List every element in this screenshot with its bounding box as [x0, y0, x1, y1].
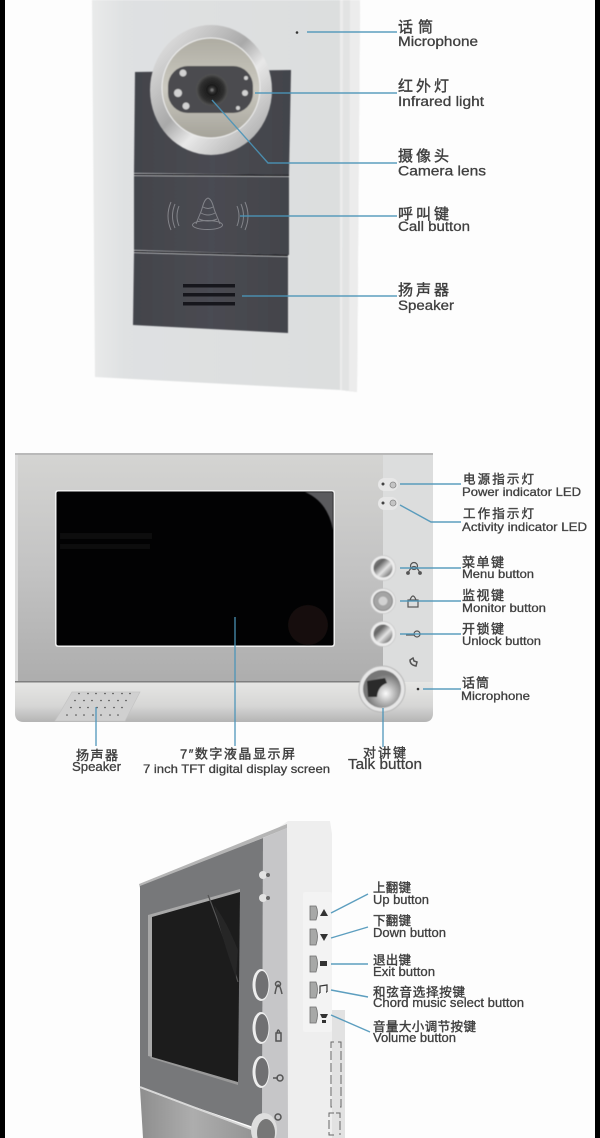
gray front bezel — [140, 838, 263, 1130]
callout: activity indicator LED: Activity indicator LED — [462, 520, 587, 534]
callout: speaker — [242, 281, 455, 313]
callout: chord music select button: Chord music select button — [373, 996, 524, 1010]
callout: microphone: Microphone — [461, 689, 530, 703]
callout: volume button: Volume button — [373, 1031, 456, 1045]
callout: exit button: 退出键 — [373, 954, 411, 968]
callout: camera lens: Camera lens — [398, 164, 486, 178]
monitor body — [15, 453, 433, 722]
callout: volume button: 音量大小调节按键 — [373, 1019, 476, 1034]
round buttons — [370, 556, 396, 646]
panel: monitor side view — [139, 821, 524, 1138]
callout: unlock button — [400, 622, 541, 648]
rear slot outlines — [329, 1042, 341, 1135]
side button symbols — [319, 909, 328, 1023]
callout: down button: Down button — [373, 926, 446, 940]
callout: speaker: Speaker — [72, 760, 121, 774]
callout: power indicator LED — [400, 472, 581, 499]
callout: activity indicator LED: 工作指示灯 — [463, 506, 534, 521]
callout: speaker: 扬声器 — [76, 748, 118, 763]
callout: display screen: 7 inch TFT digital display screen — [143, 762, 330, 776]
callout: display screen: 7″数字液晶显示屏 — [180, 746, 295, 762]
button icons — [406, 562, 421, 666]
callout: menu button: 菜单键 — [462, 555, 504, 570]
callout: menu button — [400, 555, 534, 581]
side slide buttons — [310, 906, 318, 1023]
tilted screen — [148, 889, 240, 1085]
callout: talk button: 对讲键 — [363, 746, 406, 760]
callout: activity indicator LED — [400, 505, 587, 534]
callout: camera lens: 摄像头 — [398, 148, 449, 165]
callout: chord music select button — [331, 984, 524, 1010]
callout: unlock button: Unlock button — [462, 634, 541, 648]
callout: unlock button: 开锁键 — [462, 622, 504, 636]
callout: talk button — [348, 708, 422, 773]
callout: down button: 下翻键 — [373, 914, 411, 928]
indicator LEDs — [378, 478, 398, 510]
callout: microphone — [423, 676, 530, 703]
callout: down button — [331, 914, 446, 940]
callout: microphone: 话筒 — [398, 19, 433, 36]
callout: camera lens — [212, 100, 486, 178]
callout: exit button: Exit button — [373, 965, 435, 979]
callout: infrared light — [255, 78, 484, 109]
callout: speaker: Speaker — [398, 298, 455, 313]
lower speaker strip — [140, 1088, 272, 1138]
callout: exit button — [331, 954, 435, 979]
speaker grille — [55, 692, 140, 721]
dark button module — [133, 70, 291, 333]
callout: menu button: Menu button — [462, 567, 534, 581]
icon: bell — [168, 198, 248, 230]
callout: call button: Call button — [398, 219, 470, 234]
callout: volume button — [331, 1015, 476, 1045]
callout: call button: 呼叫键 — [398, 206, 449, 223]
callout: power indicator LED: Power indicator LED — [462, 485, 581, 499]
speaker slots — [183, 284, 235, 306]
outdoor unit body — [92, 0, 360, 392]
front icons — [273, 982, 283, 1120]
callout: call button — [240, 206, 470, 234]
callout: up button: 上翻键 — [373, 881, 411, 895]
panel: outdoor door unit — [92, 0, 486, 392]
side body — [139, 821, 345, 1138]
callout: chord music select button: 和弦音选择按键 — [373, 984, 465, 1000]
callout: display screen — [143, 617, 330, 776]
callout: infrared light: Infrared light — [398, 94, 484, 109]
callout: up button: Up button — [373, 893, 429, 907]
callout: microphone: 话筒 — [462, 676, 489, 690]
callout: infrared light: 红外灯 — [398, 78, 449, 95]
front buttons and LEDs — [251, 871, 277, 1138]
callout: microphone: Microphone — [398, 34, 478, 49]
callout: monitor button: Monitor button — [462, 601, 546, 615]
callout: monitor button — [400, 588, 546, 615]
camera ring and lens — [150, 25, 272, 155]
LCD screen — [55, 490, 335, 647]
callout: power indicator LED: 电源指示灯 — [463, 472, 534, 486]
callout: microphone — [307, 19, 478, 49]
callout: monitor button: 监视键 — [462, 588, 504, 603]
callout: up button — [331, 881, 429, 913]
panel: indoor monitor front — [15, 453, 587, 776]
callout: talk button: Talk button — [348, 756, 422, 773]
callout: speaker: 扬声器 — [398, 281, 449, 299]
callout: speaker — [72, 707, 121, 774]
talk button — [359, 666, 405, 712]
